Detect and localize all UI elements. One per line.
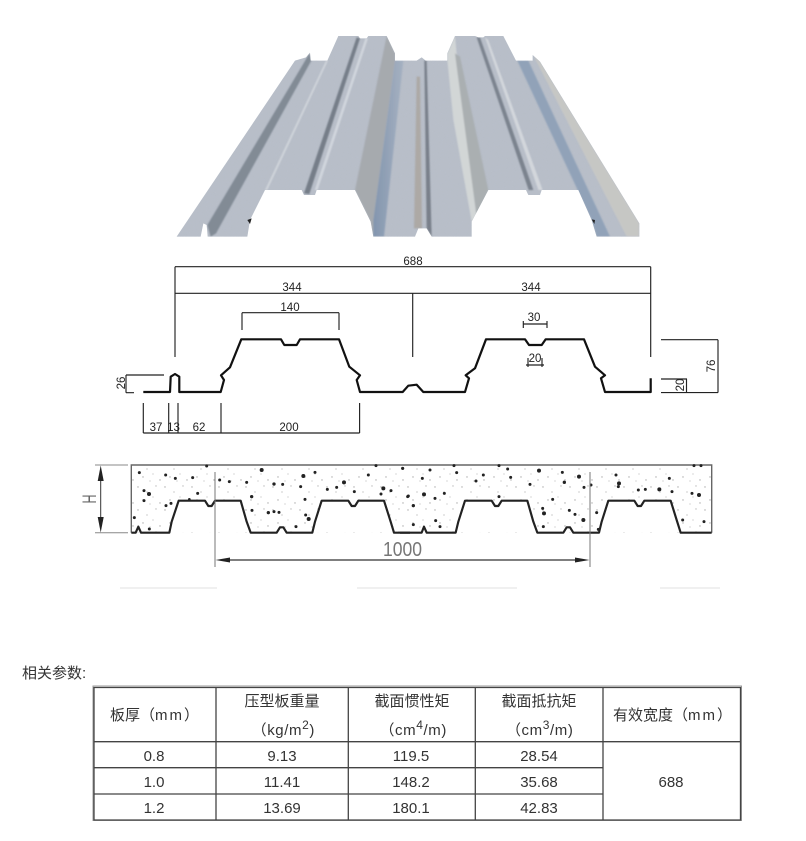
row thickness 1.0: 1.0	[144, 774, 164, 791]
table header row: （cm	[506, 722, 543, 739]
dimension labels: 30	[528, 312, 540, 324]
dimension labels: 76	[706, 360, 718, 372]
dimension labels: 37	[150, 422, 162, 434]
aggregate dots left	[133, 464, 409, 530]
steel profile line	[143, 339, 651, 392]
row thickness 0.8: 119.5	[393, 748, 429, 765]
dimension labels: 200	[279, 422, 299, 434]
table header row: （cm	[379, 722, 416, 739]
table header row: )	[309, 722, 315, 739]
row thickness 0.8: 9.13	[267, 748, 297, 765]
merged effective width cell: 688	[658, 774, 684, 791]
table header row: /m)	[424, 722, 447, 739]
table header row: 压型板重量	[244, 692, 320, 710]
table grid	[93, 686, 742, 820]
concrete fill texture	[131, 465, 712, 533]
dimension labels: 26	[116, 377, 128, 389]
row thickness 0.8: 28.54	[520, 748, 558, 765]
row thickness 1.2	[144, 800, 558, 817]
table header row: 3	[543, 718, 550, 732]
left flange fold line	[265, 61, 328, 190]
row thickness 1.2: 13.69	[263, 800, 301, 817]
heading: related parameters: 相关参数:	[22, 665, 86, 682]
width dimension 1000	[215, 472, 590, 567]
dimension labels: 20	[529, 353, 541, 365]
row thickness 0.8	[144, 748, 558, 765]
width dimension 1000: 1000	[383, 539, 422, 561]
dimension labels	[116, 256, 718, 434]
row thickness 0.8: 0.8	[144, 748, 164, 765]
row thickness 1.2: 42.83	[520, 800, 558, 817]
height dimension H: H	[80, 494, 101, 504]
deck profile right half	[400, 501, 712, 533]
parameter table	[93, 686, 742, 820]
table header row: /m)	[550, 722, 574, 739]
table header row: 有效宽度（mm）	[613, 707, 732, 724]
aggregate dots right	[401, 464, 705, 531]
dimension labels: 140	[280, 302, 300, 314]
row thickness 1.2: 1.2	[144, 800, 164, 817]
row thickness 1.0: 11.41	[264, 774, 300, 791]
dimension labels: 62	[193, 422, 205, 434]
left lap rib shading	[207, 53, 311, 237]
table header row: 2	[302, 718, 309, 732]
dimension labels: 344	[282, 282, 302, 294]
faint image artefact lines	[120, 587, 720, 589]
table header row: 4	[416, 718, 424, 732]
row thickness 1.0: 148.2	[392, 774, 430, 791]
deck profile left half	[131, 501, 410, 533]
dimension labels: 344	[521, 282, 541, 294]
table header row: 板厚（mm）	[110, 706, 199, 724]
right crest rib	[477, 37, 533, 190]
right web	[447, 36, 477, 222]
section drawing with dimensions	[116, 256, 718, 434]
centre rib	[414, 77, 422, 228]
concrete composite slab drawing	[80, 464, 720, 588]
row thickness 1.2: 180.1	[392, 800, 430, 817]
table header row: 截面惯性矩	[374, 693, 450, 710]
slab outline top, left and right	[131, 465, 712, 533]
row thickness 1.0: 35.68	[520, 774, 558, 791]
metal deck photo illustration	[177, 36, 639, 237]
dimension labels: 688	[403, 256, 423, 268]
table header row: 截面抵抗矩	[501, 693, 577, 710]
dimension labels: 20	[675, 379, 687, 391]
cut edge marks	[247, 218, 252, 224]
left web	[355, 36, 395, 237]
deck silhouette	[177, 36, 639, 237]
deck shading clipped to silhouette	[207, 36, 639, 237]
table header row	[110, 692, 732, 739]
table header row: （kg/m	[252, 722, 302, 739]
left crest rib	[304, 37, 360, 194]
right lap shading	[517, 61, 610, 237]
row thickness 1.0	[144, 774, 558, 791]
height dimension H	[80, 465, 128, 533]
dimension labels: 13	[167, 422, 180, 434]
dimension lines	[126, 267, 718, 433]
